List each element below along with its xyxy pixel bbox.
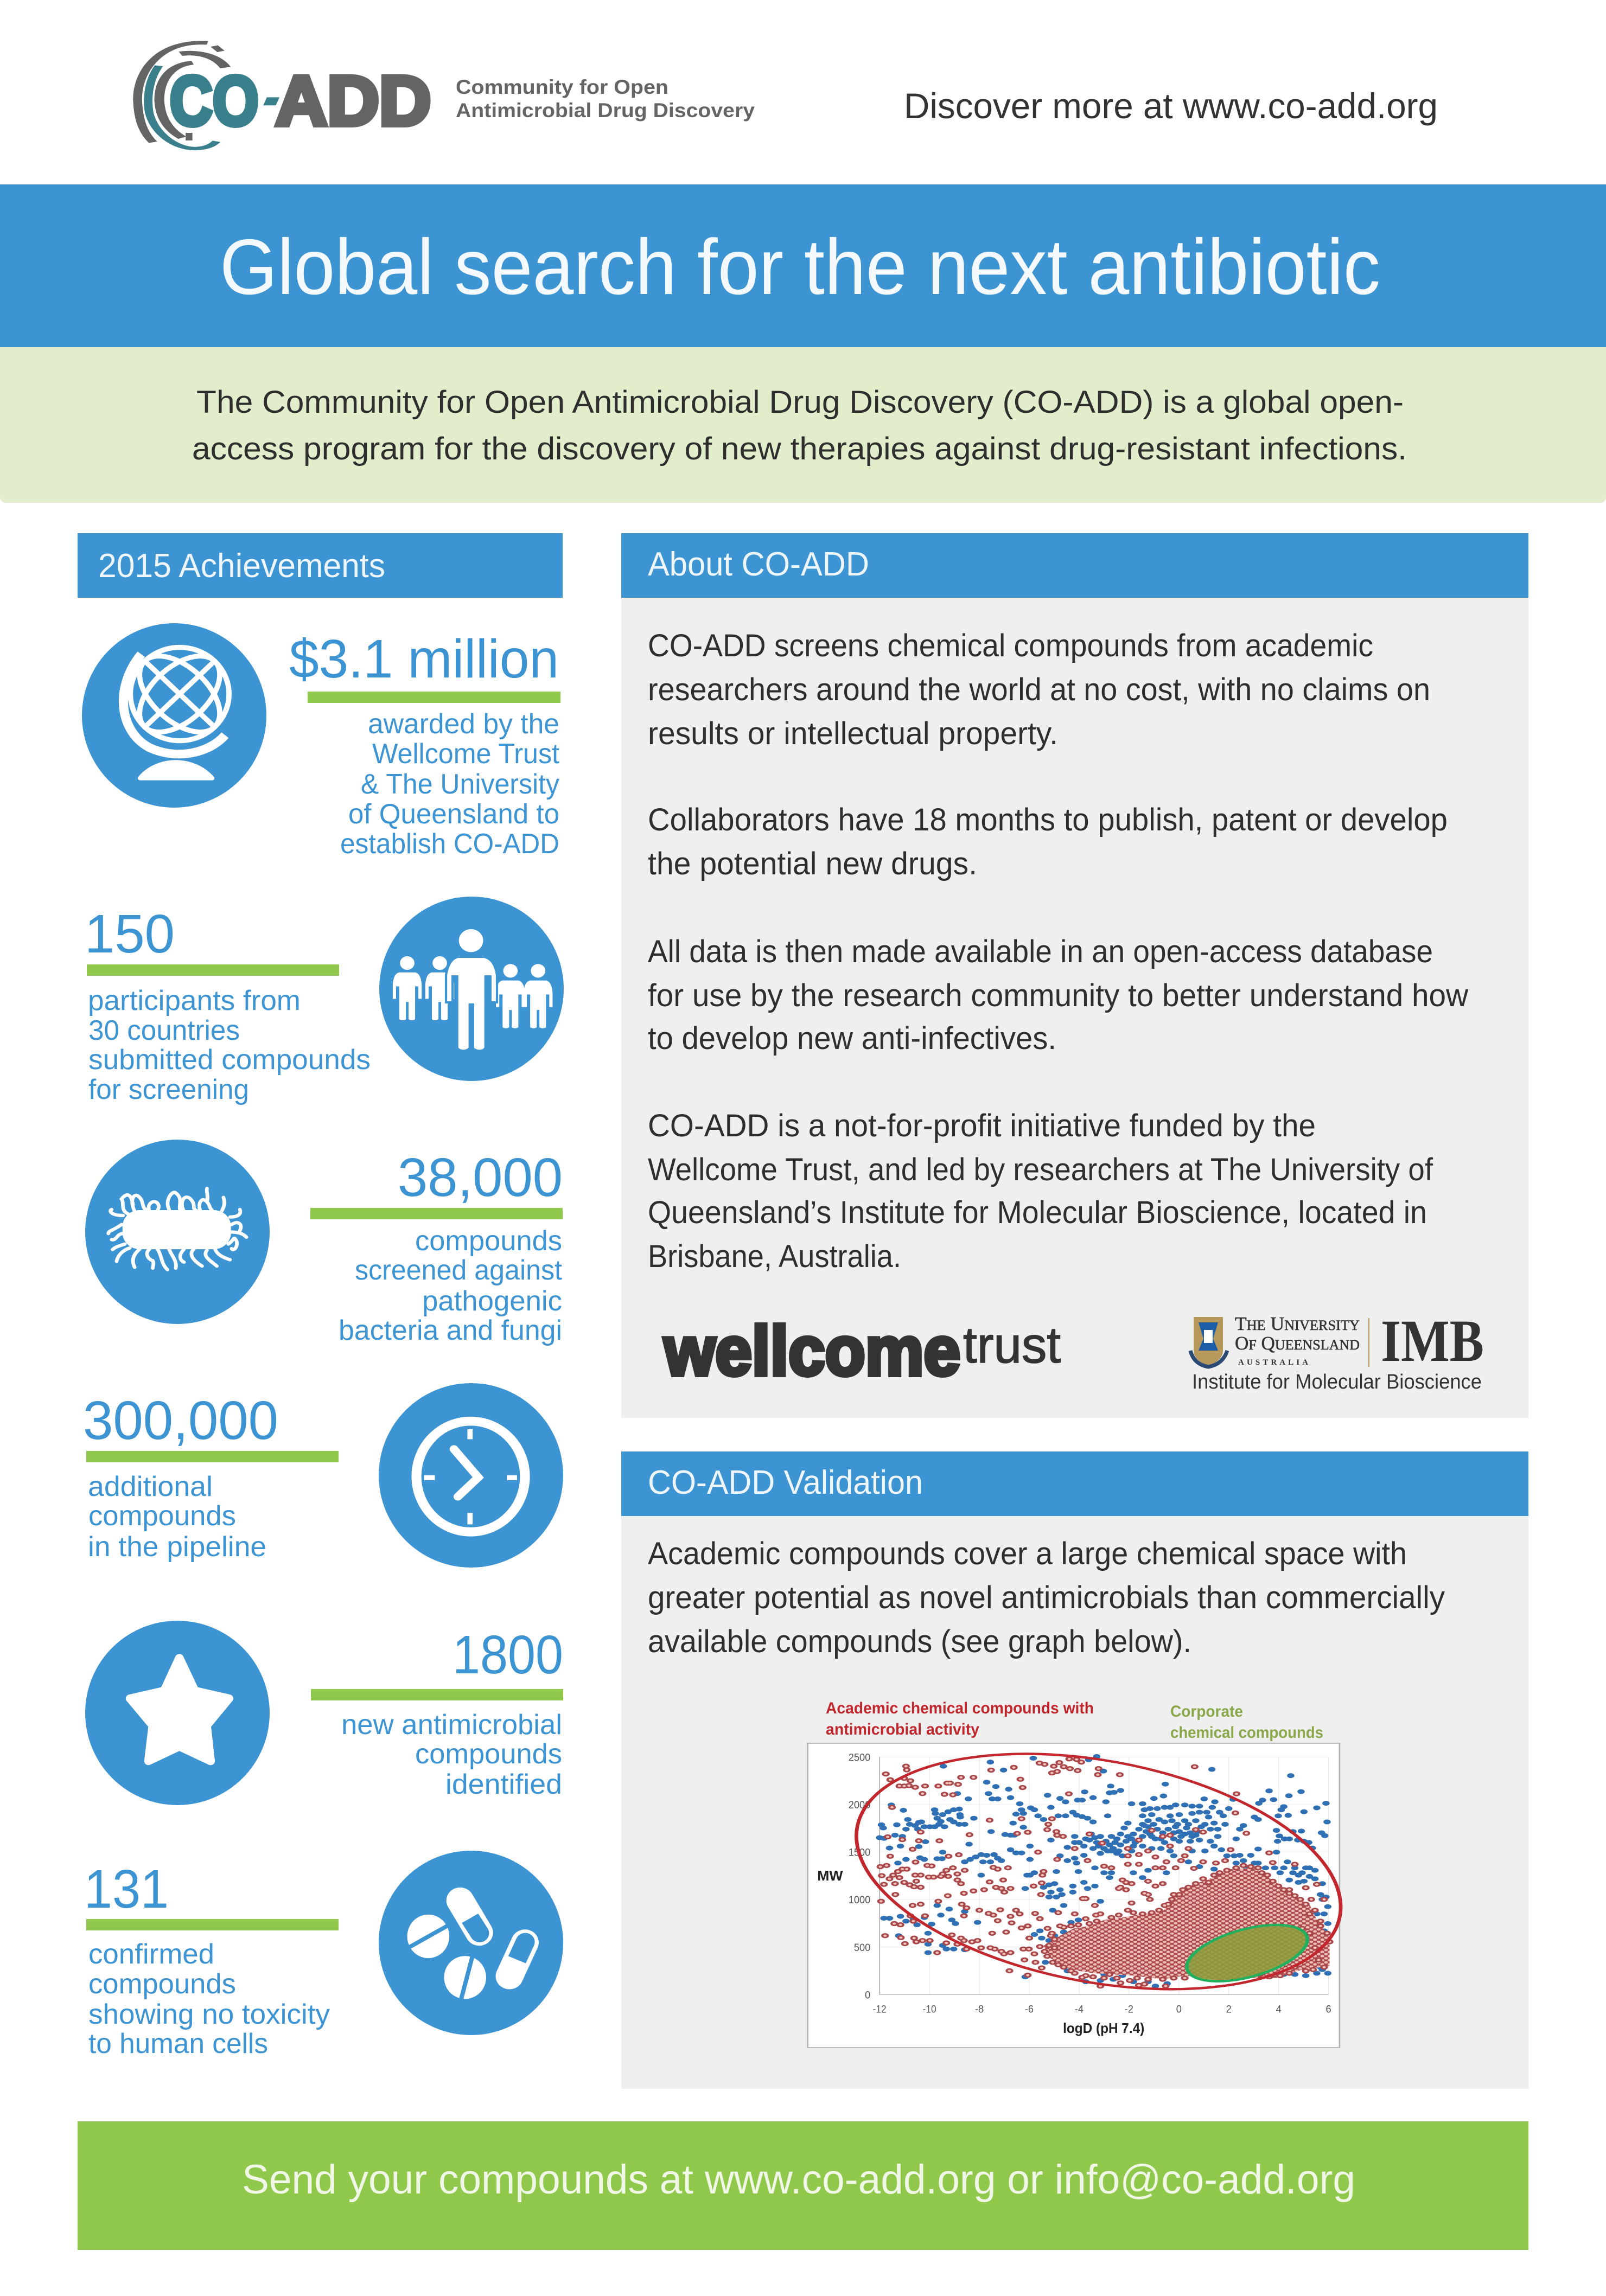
x axis labels: 4 [1276,2004,1282,2015]
logo: University of Queensland IMB: IMB [1381,1308,1484,1374]
stat: $3.1 million: awarded by the [368,708,559,740]
logo mark and wordmark [138,43,431,149]
body text: about: for use by the research community to better understand how [648,978,1469,1013]
x axis labels [873,2004,1331,2015]
x axis labels: 0 [1176,2004,1182,2015]
logo: CO-ADD [138,43,755,149]
stat: 131: 131 [84,1859,169,1920]
logo: University of Queensland IMB: AUSTRALIA [1238,1358,1308,1367]
x axis labels: -12 [873,2004,887,2015]
heading: about: About CO-ADD [648,546,869,583]
icon: people [379,897,564,1081]
chart annotation: corporate compounds [1170,1703,1323,1742]
stat: 131: showing no toxicity [88,1999,330,2030]
logo: University of Queensland IMB: THE UNIVERSITY [1235,1313,1360,1334]
axis title: logD: logD (pH 7.4) [1063,2021,1144,2036]
heading: about [621,533,1528,598]
icon: bacterium [85,1140,270,1324]
stat: $3.1 million: Wellcome Trust [372,738,560,770]
y axis labels: 500 [854,1942,870,1954]
scatter chart [803,1709,1394,2048]
logo mark and wordmark: CO [170,62,259,140]
stat: 131: to human cells [88,2028,268,2060]
stat: 150 [85,897,564,1105]
icon: star [85,1621,270,1805]
body text: about: the potential new drugs. [648,846,977,881]
logo tagline [456,76,755,121]
stat: 38,000: compounds [415,1225,562,1257]
chart annotation: academic compounds [826,1699,1094,1738]
body text: about: Queensland’s Institute for Molecular Bioscience, located in [648,1195,1427,1230]
stat: $3.1 million: & The University [361,769,559,800]
stat: 1800: compounds [415,1738,562,1770]
body text: about: results or intellectual property. [648,716,1058,751]
stat: 38,000: 38,000 [398,1147,563,1208]
stat: 150: 150 [85,904,175,964]
y axis labels: 1500 [849,1847,870,1858]
body text: validation: Academic compounds cover a large chemical space with [648,1536,1407,1571]
title banner [0,184,1606,347]
x axis labels: -4 [1075,2004,1084,2015]
panel: about CO-ADD [621,533,1528,1418]
stat: 300,000: in the pipeline [88,1531,266,1563]
body text: about: researchers around the world at no cost, with no claims on [648,672,1430,707]
intro band: access program for the discovery of new therapies against drug-resistant infections. [192,431,1407,466]
stat: 300,000 [83,1383,563,1568]
body text: about: Brisbane, Australia. [648,1239,901,1274]
stat: 131: compounds [88,1968,236,2000]
stat: 1800 [85,1621,563,1805]
body text: about: CO-ADD screens chemical compounds from academic [648,628,1373,663]
heading: validation: CO-ADD Validation [648,1464,923,1501]
body text: validation [648,1536,1445,1659]
logo tagline: Community for Open [456,76,668,98]
icon: pills [379,1851,563,2035]
icon: clock [379,1383,563,1568]
stat: 150: 30 countries [88,1015,240,1046]
body text: about: All data is then made available in an open-access database [648,934,1433,969]
logo: CO-ADD: ADD [276,62,431,140]
stat: 1800: identified [445,1769,562,1800]
footer call to action: Send your compounds at www.co-add.org or info@co-add.org [242,2157,1355,2203]
body text: validation: available compounds (see graph below). [648,1624,1191,1659]
stat: 1800: 1800 [453,1625,563,1685]
chart annotation: corporate compounds: chemical compounds [1170,1724,1323,1742]
logo: University of Queensland IMB: OF QUEENSLAND [1235,1333,1360,1354]
y axis labels: 0 [865,1990,870,2001]
panel: CO-ADD validation [621,1451,1528,2089]
stat: 131 [84,1851,563,2060]
panel: 2015 achievements header: 2015 Achievements [98,547,385,585]
axis title: MW: MW [817,1868,843,1884]
intro band [0,347,1606,503]
x axis labels: 6 [1326,2004,1331,2015]
footer call to action [78,2121,1528,2250]
dense region: academic compounds [1043,1868,1330,1980]
stat: 38,000: pathogenic [422,1285,562,1317]
stat: 300,000: 300,000 [83,1390,278,1451]
logo tagline: Antimicrobial Drug Discovery [456,99,755,121]
stat: 150: submitted compounds [88,1044,371,1076]
stat: 1800: new antimicrobial [341,1709,562,1741]
stat: 150: participants from [88,985,301,1016]
body text: about: Collaborators have 18 months to publish, patent or develop [648,802,1448,837]
x axis labels: -8 [975,2004,984,2015]
x axis labels: -2 [1125,2004,1133,2015]
x axis labels: -6 [1025,2004,1034,2015]
stat: 38,000: screened against [355,1255,563,1286]
icon: globe [82,623,266,808]
intro band: The Community for Open Antimicrobial Drug Discovery (CO-ADD) is a global open- [196,385,1404,420]
logo: University of Queensland IMB: Institute for Molecular Bioscience [1192,1371,1482,1393]
panel: 2015 achievements header [78,533,563,598]
heading: validation [621,1451,1528,1516]
body text: about [648,628,1469,1274]
stat: $3.1 million: establish CO-ADD [340,828,559,860]
body text: about: to develop new anti-infectives. [648,1021,1056,1056]
stat: 38,000 [85,1140,563,1346]
website link: Discover more at www.co-add.org [904,86,1438,126]
stat: $3.1 million: of Queensland to [348,798,559,830]
x axis labels: 2 [1226,2004,1232,2015]
chart annotation: academic compounds: antimicrobial activity [826,1721,979,1738]
stat: $3.1 million [82,623,560,860]
logo: wellcome trust: wellcome [664,1313,960,1390]
x axis labels: -10 [923,2004,936,2015]
y axis labels: 2000 [849,1800,870,1811]
ellipse: academic compounds outline [803,1709,1394,2033]
y axis labels [849,1752,870,2001]
stat: 150: for screening [88,1074,249,1105]
stat: 131: confirmed [88,1939,214,1970]
red points: academic compounds [881,1759,1330,1986]
y axis labels: 2500 [849,1752,870,1763]
blue points: commercial compounds [880,1756,1328,1986]
logo: University of Queensland IMB [1190,1308,1484,1393]
stat: 300,000: compounds [88,1500,236,1532]
y axis labels: 1000 [849,1895,870,1906]
logo: wellcome trust: trust [963,1316,1061,1373]
body text: about: CO-ADD is a not-for-profit initiative funded by the [648,1108,1316,1143]
title: Global search for the next antibiotic [220,223,1380,311]
ellipse: corporate compounds region [1173,1913,1321,1993]
chart annotation: corporate compounds: Corporate [1170,1703,1243,1721]
stat: 300,000: additional [88,1471,213,1502]
body text: validation: greater potential as novel antimicrobials than commercially [648,1580,1445,1615]
stat: $3.1 million: $3.1 million [289,629,559,689]
chart annotation: academic compounds: Academic chemical compounds with [826,1699,1094,1717]
stat: 38,000: bacteria and fungi [339,1315,562,1346]
body text: about: Wellcome Trust, and led by researchers at The University of [648,1152,1433,1187]
